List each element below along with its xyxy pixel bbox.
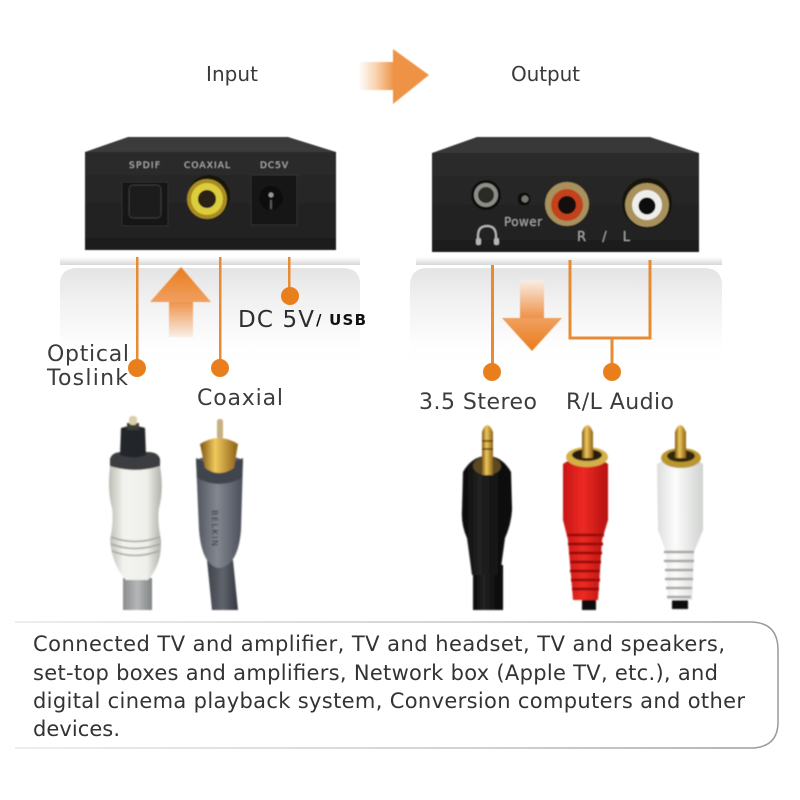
label: 3.5 Stereo: 3.5 Stereo <box>419 390 537 415</box>
label: Power: Power <box>504 215 542 229</box>
plug: coaxial <box>196 419 243 610</box>
icon: power LED <box>518 192 530 206</box>
plug: white RCA <box>657 425 703 609</box>
label: Optical Toslink: Optical <box>47 342 129 367</box>
text block: description <box>33 632 745 741</box>
label: SPDIF: SPDIF <box>129 161 160 171</box>
connector: DC line <box>281 257 299 305</box>
plug: 3.5 stereo <box>462 425 512 610</box>
arrow: input to output <box>358 49 429 104</box>
label: R/L Audio: R/L Audio <box>566 390 674 415</box>
arrow: down <box>502 280 562 351</box>
panel: description box <box>15 622 778 748</box>
label: COAXIAL: COAXIAL <box>184 161 230 171</box>
port: coaxial <box>187 175 230 219</box>
text block: description: set-top boxes and amplifiers, Network box (Apple TV, etc.), and <box>33 661 718 685</box>
heading: Input: Input <box>206 62 258 86</box>
panel: input reflection <box>60 257 360 362</box>
text block: description: digital cinema playback system, Conversion computers and other <box>33 689 745 713</box>
label: Optical Toslink <box>46 342 129 391</box>
plug: coaxial: BELKIN <box>210 510 219 546</box>
label: / USB: / USB <box>316 311 366 329</box>
connector: stereo line <box>483 265 501 381</box>
port: headphone jack <box>471 180 501 210</box>
arrow: up <box>150 267 211 337</box>
port: DC power <box>251 175 297 225</box>
connector: optical line <box>128 257 146 377</box>
heading: Output: Output <box>511 62 580 86</box>
connector: coaxial line <box>211 257 229 377</box>
label: Optical Toslink: Toslink <box>46 366 128 391</box>
plug: red RCA <box>563 425 608 610</box>
port: white RCA <box>622 178 672 228</box>
text block: description: Connected TV and amplifier, TV and headset, TV and speakers, <box>33 632 725 656</box>
icon: headphones <box>476 226 499 245</box>
label: DC5V: DC5V <box>260 161 289 171</box>
connector: R/L line <box>570 260 650 381</box>
label: R / L: R / L <box>577 230 631 245</box>
text block: description: devices. <box>33 717 120 741</box>
port: optical <box>122 182 168 226</box>
label: Coaxial: Coaxial <box>197 386 283 411</box>
port: red RCA <box>545 182 589 226</box>
panel: output reflection <box>410 257 722 362</box>
device: input side <box>85 137 336 250</box>
device: output side <box>432 137 699 252</box>
plug: optical Toslink <box>109 416 162 610</box>
label: DC 5V: DC 5V <box>238 307 314 333</box>
